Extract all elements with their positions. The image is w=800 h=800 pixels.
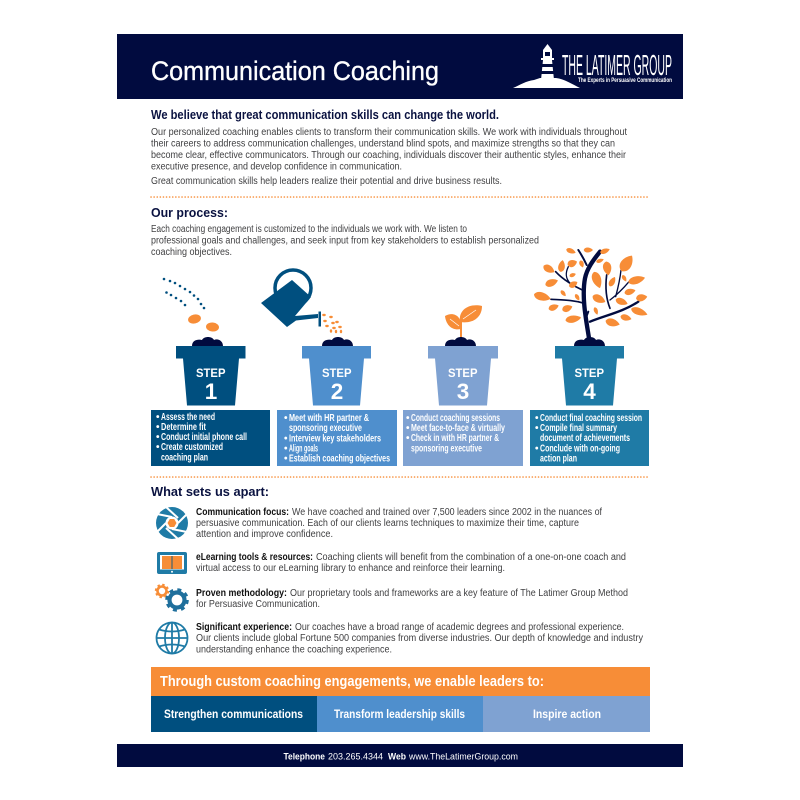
step 1 list box: • — [156, 432, 160, 443]
soil — [574, 337, 605, 346]
title: Communication Coaching — [151, 56, 439, 86]
process paragraph — [151, 224, 539, 258]
step 4: 4 — [583, 379, 596, 404]
pot — [428, 346, 498, 406]
step 4 list box: • — [535, 444, 539, 454]
intro paragraph: become clear, effective communicators. Through our coaching, individuals discover their authentic styles, enhance their — [151, 150, 627, 161]
item: elearning tools — [157, 552, 626, 574]
intro paragraph — [151, 127, 627, 172]
item: proven methodology: Proven methodology: — [196, 588, 287, 599]
item: elearning tools: virtual access to our eLearning library to enhance and reinforce their learning. — [196, 563, 505, 574]
intro paragraph: Our personalized coaching enables clients to transform their communication skills. We work with individuals throughout — [151, 127, 627, 138]
outcome: inspire action: Inspire action — [533, 709, 601, 721]
step 4 list box: action plan — [540, 454, 577, 464]
step 3 list box: Conduct coaching sessions — [411, 413, 500, 424]
footer: Web — [388, 752, 406, 762]
outcome: transform leadership skills — [317, 696, 483, 732]
step 1 list box: • — [156, 442, 160, 453]
step 1: STEP — [196, 368, 226, 380]
step 4: STEP — [574, 368, 604, 380]
item: communication focus: persuasive communication. Each of our clients learns techniques to maximize their time, capture — [196, 518, 579, 529]
icon: gears — [156, 585, 188, 610]
icon: globe — [156, 622, 188, 654]
icon: watering can — [261, 270, 342, 333]
step 3 list box: • — [406, 433, 410, 444]
step 2 list box: Interview key stakeholders — [289, 434, 381, 444]
step 2 list box: • — [284, 434, 288, 444]
step 2 list box: • — [284, 413, 288, 424]
pot — [176, 346, 246, 406]
step 4 list box: Conduct final coaching session — [540, 413, 642, 424]
step 1 list box: Determine fit — [161, 422, 206, 433]
process paragraph: coaching objectives. — [151, 247, 232, 258]
step 3 — [403, 305, 523, 466]
step 3: STEP — [448, 368, 478, 380]
outcome: strengthen communications: Strengthen communications — [164, 709, 303, 721]
step 2 list box: Meet with HR partner & — [289, 413, 369, 424]
step 4 list box: • — [535, 423, 539, 434]
step 4 list box: • — [535, 413, 539, 424]
outcome: transform leadership skills: Transform leadership skills — [334, 709, 465, 721]
intro paragraph: executive presence, and develop confidence in communication. — [151, 162, 402, 172]
soil — [445, 337, 476, 346]
step 1 list box: • — [156, 412, 160, 423]
step 1 list box: • — [156, 422, 160, 433]
process paragraph: professional goals and challenges, and seek input from key stakeholders to establish personalized — [151, 236, 539, 246]
logo: The Latimer Group: The Experts in Persuasive Communication — [578, 78, 672, 84]
step 3 list box: Check in with HR partner & — [411, 433, 499, 444]
step 2 — [261, 270, 397, 466]
pot — [302, 346, 371, 406]
step 4 list box: Conclude with on-going — [540, 444, 620, 454]
step 3 list box: • — [406, 413, 410, 424]
step 1 list box: Assess the need — [161, 412, 215, 423]
step 2 list box — [277, 410, 397, 466]
step 3 list box: Meet face-to-face & virtually — [411, 423, 505, 434]
step 2 list box: • — [284, 454, 288, 464]
callout band: Through custom coaching engagements, we enable leaders to: — [160, 673, 544, 690]
item: proven methodology: Our proprietary tools and frameworks are a key feature of The Latimer Group Method — [290, 588, 628, 599]
step 2: STEP — [322, 368, 352, 380]
intro heading: We believe that great communication skills can change the world. — [151, 107, 499, 122]
item: proven methodology: for Persuasive Communication. — [196, 599, 320, 610]
intro paragraph: their careers to address communication challenges, understand blind spots, and maximize strengths so that they can — [151, 138, 615, 150]
step 1 — [151, 278, 270, 466]
footer — [117, 744, 683, 767]
outcome: inspire action — [483, 696, 650, 732]
icon: tree — [533, 247, 649, 345]
logo: The Latimer Group — [513, 44, 672, 88]
item: significant experience — [156, 622, 643, 656]
item: significant experience: Our clients include global Fortune 500 companies from diverse industries. Our depth of knowledge and industry — [196, 633, 643, 644]
process heading: Our process: — [151, 205, 228, 220]
step 3 list box: • — [406, 423, 410, 434]
step 3: 3 — [457, 379, 469, 404]
intro section — [151, 107, 627, 187]
step 1 list box — [151, 410, 270, 466]
footer: www.TheLatimerGroup.com — [408, 752, 518, 762]
step 2: 2 — [331, 379, 343, 404]
step 3 list box — [403, 410, 523, 466]
step 1 list box: Create customized — [161, 442, 223, 453]
footer: Telephone — [284, 752, 325, 762]
item: communication focus: We have coached and trained over 7,500 leaders since 2002 in the nuances of — [292, 507, 602, 518]
step 1: 1 — [205, 379, 217, 404]
intro closing line: Great communication skills help leaders realize their potential and drive business results. — [151, 176, 502, 187]
item: elearning tools: eLearning tools & resources: — [196, 552, 313, 563]
pot — [555, 346, 624, 406]
step 1 list box: Conduct initial phone call — [161, 432, 247, 443]
item: significant experience: Significant experience: — [196, 622, 292, 633]
item: communication focus: Communication focus: — [196, 507, 289, 518]
step 2 list box: sponsoring executive — [289, 423, 362, 434]
item: communication focus — [156, 507, 602, 540]
step 4 list box: Compile final summary — [540, 423, 617, 434]
step 4 list box: document of achievements — [540, 433, 630, 444]
step 2 list box: Align goals — [289, 444, 318, 454]
icon: seeds falling — [163, 278, 219, 332]
process paragraph: Each coaching engagement is customized to the individuals we work with. We listen to — [151, 224, 467, 235]
apart heading: What sets us apart: — [151, 484, 269, 499]
outcome: strengthen communications — [151, 696, 317, 732]
step 1 list box: coaching plan — [161, 452, 208, 464]
item: elearning tools: Coaching clients will benefit from the combination of a one-on-one coach and — [316, 552, 626, 563]
item: proven methodology — [156, 585, 628, 610]
icon: tablet with book — [157, 552, 187, 574]
footer: 203.265.4344 — [328, 752, 383, 762]
item: significant experience: Our coaches have a broad range of academic degrees and professional experience. — [295, 622, 624, 633]
soil — [192, 337, 223, 346]
soil — [322, 337, 353, 346]
callout band — [151, 667, 650, 732]
step 4 — [530, 247, 649, 466]
icon: aperture — [156, 507, 188, 539]
item: communication focus: attention and improve confidence. — [196, 529, 333, 540]
item: significant experience: understanding enhance the coaching experience. — [196, 644, 392, 656]
step 2 list box: • — [284, 444, 288, 454]
step 2 list box: Establish coaching objectives — [289, 454, 390, 464]
icon: sprout — [445, 305, 482, 339]
header banner — [117, 34, 683, 99]
step 3 list box: sponsoring executive — [411, 444, 482, 454]
step 4 list box — [530, 410, 649, 466]
